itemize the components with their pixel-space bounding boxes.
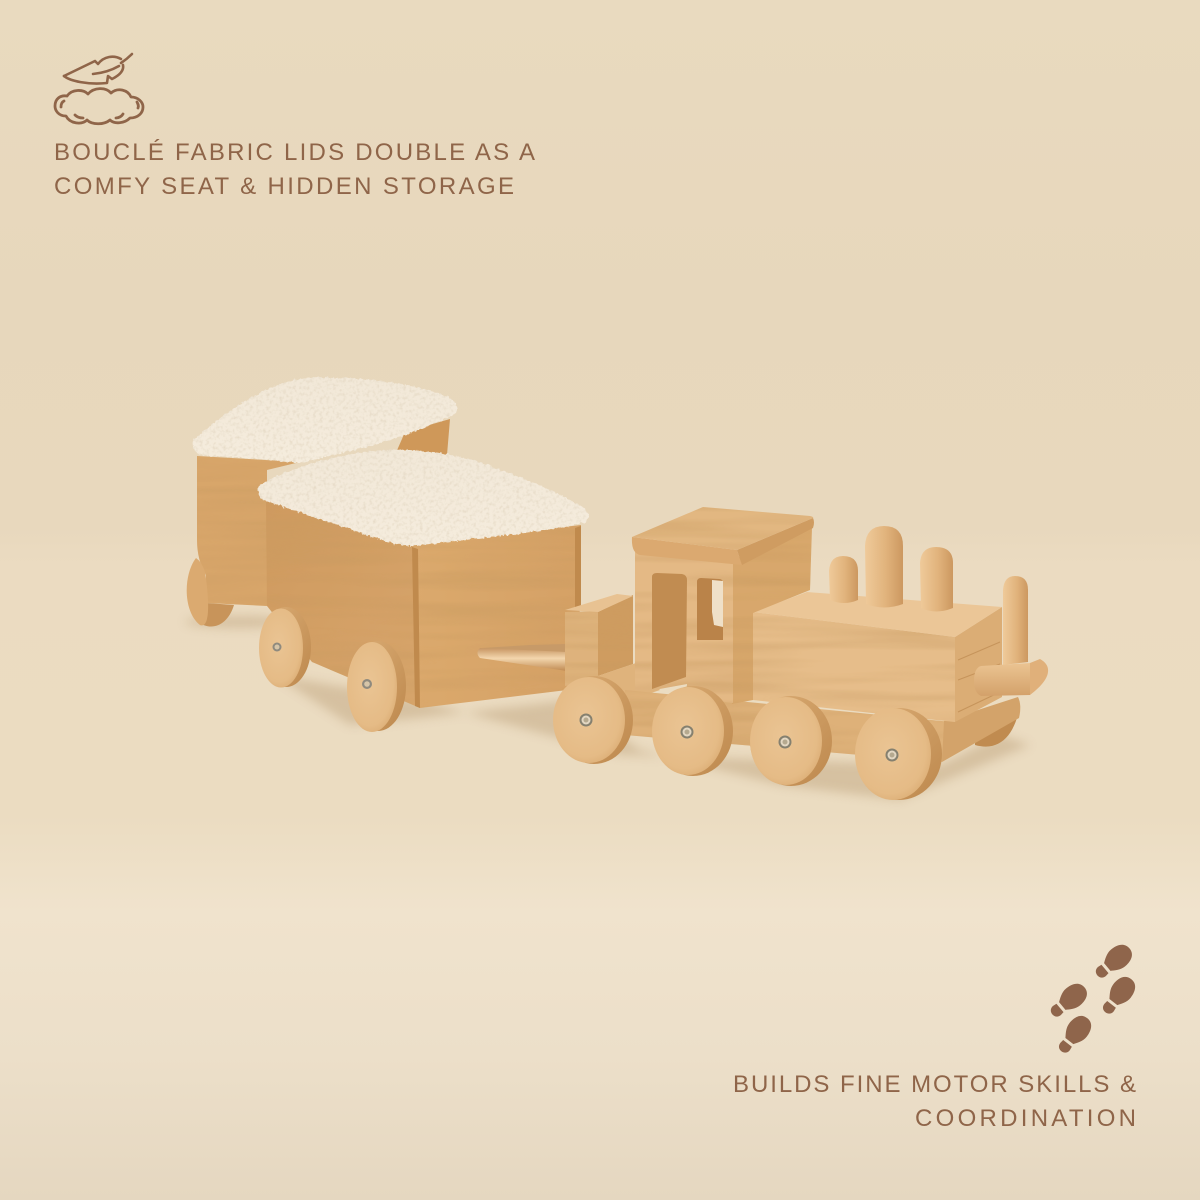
locomotive front buffer — [974, 659, 1048, 696]
rear carriage body — [197, 456, 300, 606]
rear carriage — [187, 377, 457, 627]
locomotive cab — [632, 507, 814, 704]
illustration: wooden toy train — [187, 377, 1048, 800]
floor shadows under the train — [185, 616, 1030, 800]
cab door — [652, 573, 687, 689]
cab window — [697, 578, 723, 640]
locomotive hidden front wheel — [975, 700, 1020, 747]
footprint 2 — [1045, 979, 1092, 1023]
locomotive wheel 2 — [652, 686, 733, 776]
locomotive chimneys — [829, 526, 1028, 665]
cloud — [55, 89, 143, 124]
locomotive footplate — [598, 663, 1020, 762]
icon: footprints — [1045, 940, 1140, 1058]
cab roof — [632, 507, 814, 565]
footprint 3 — [1097, 972, 1140, 1019]
front carriage wheel, rear — [259, 607, 311, 688]
footprint 1 — [1090, 940, 1137, 984]
feather — [64, 54, 132, 84]
locomotive rear block — [565, 594, 633, 686]
text: fine motor skills callout: COORDINATION — [915, 1105, 1136, 1132]
locomotive wheel 1 — [553, 676, 633, 764]
text: fine motor skills callout — [733, 1071, 1136, 1132]
front carriage left face — [266, 500, 420, 708]
text: fine motor skills callout: BUILDS FINE MOTOR SKILLS & — [733, 1071, 1136, 1098]
front carriage — [258, 450, 589, 732]
front carriage bouclé lid — [258, 450, 589, 546]
front carriage front face — [412, 525, 581, 708]
text: bouclé fabric callout: COMFY SEAT & HIDDEN STORAGE — [54, 173, 514, 200]
coupling bar — [478, 644, 567, 671]
locomotive boiler — [753, 592, 1002, 722]
text: bouclé fabric callout: BOUCLÉ FABRIC LIDS DOUBLE AS A — [54, 139, 535, 166]
rear carriage wheel — [187, 558, 234, 627]
locomotive — [553, 507, 1048, 800]
front carriage wheel, front — [347, 641, 406, 732]
text: bouclé fabric callout — [54, 139, 535, 200]
locomotive wheel 4 — [855, 708, 942, 800]
icon: feather above cloud — [55, 54, 143, 124]
footprint 4 — [1053, 1011, 1096, 1058]
rear carriage bouclé lid — [193, 377, 457, 463]
locomotive wheel 3 — [750, 696, 832, 786]
